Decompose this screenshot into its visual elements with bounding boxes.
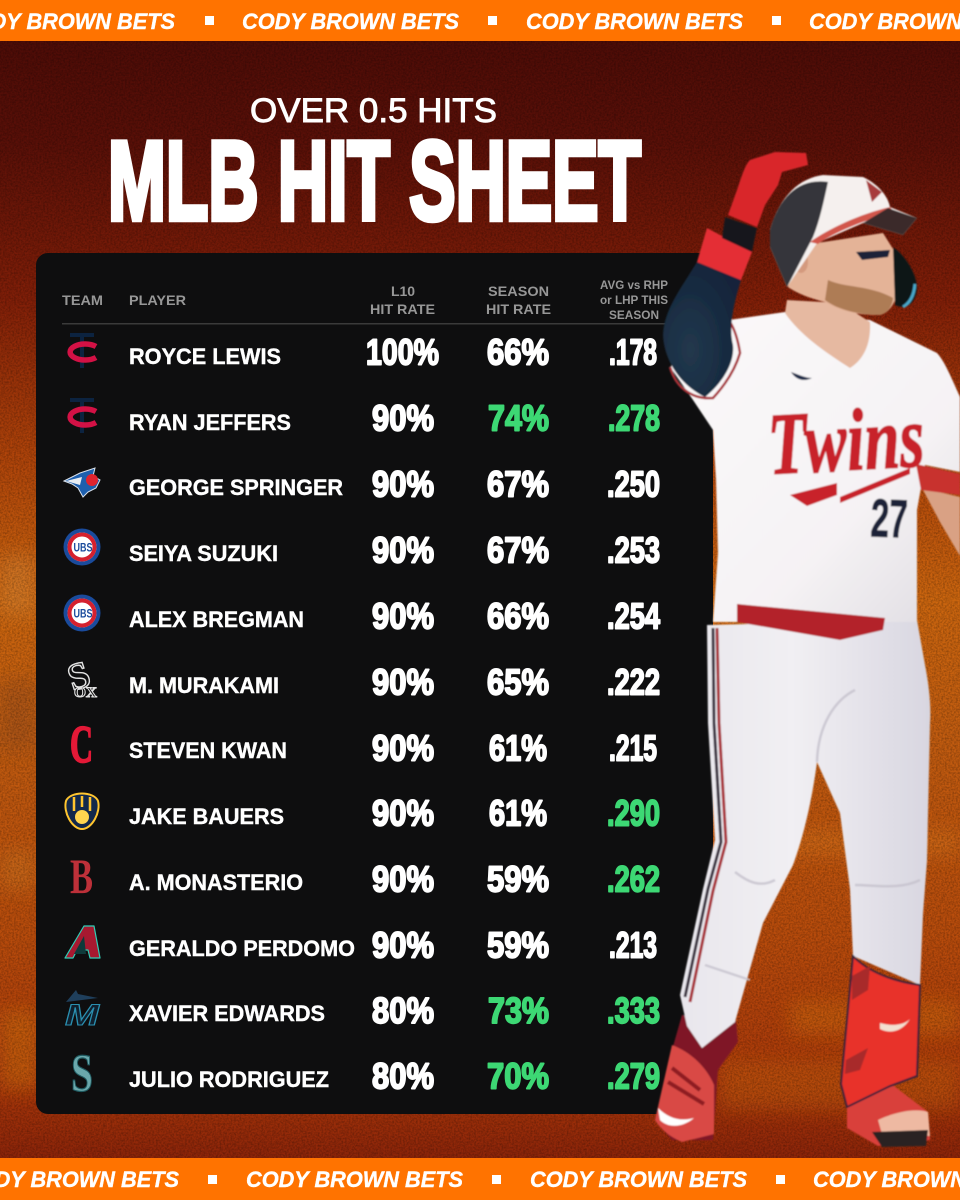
row: Julio Rodriguez: 80% bbox=[372, 1056, 434, 1096]
icon: Cubs logo: UBS bbox=[74, 540, 92, 554]
row: Alex Bregman: 90% bbox=[372, 596, 434, 636]
row: Xavier Edwards bbox=[65, 990, 660, 1032]
red arm band bbox=[697, 228, 752, 280]
row: M. Murakami: 65% bbox=[487, 662, 549, 702]
row: Ryan Jeffers: .278 bbox=[608, 398, 660, 438]
wrist band bbox=[722, 217, 757, 252]
row: Jake Bauers: .290 bbox=[607, 792, 660, 834]
bottom banner bbox=[0, 1158, 960, 1200]
row: Geraldo Perdomo: GERALDO PERDOMO bbox=[129, 936, 355, 961]
row: George Springer: 67% bbox=[487, 464, 549, 504]
row: Alex Bregman: ALEX BREGMAN bbox=[129, 607, 304, 632]
row: M. Murakami: 90% bbox=[372, 662, 434, 702]
row: Royce Lewis: 100% bbox=[366, 332, 439, 372]
right sleeve band bbox=[916, 464, 960, 495]
row: Geraldo Perdomo bbox=[65, 924, 657, 966]
icon: Twins logo bbox=[70, 335, 96, 368]
bottom banner: CODY BROWN BETS bbox=[246, 1167, 463, 1192]
row: Royce Lewis: 66% bbox=[487, 332, 549, 372]
row: Julio Rodriguez bbox=[71, 1043, 660, 1103]
row: Steven Kwan: 90% bbox=[372, 728, 434, 768]
table header: AVG vs RHP bbox=[600, 280, 668, 292]
row: Royce Lewis: .178 bbox=[609, 332, 657, 372]
icon: Marlins logo bbox=[65, 990, 100, 1032]
row: Alex Bregman: 66% bbox=[487, 596, 549, 636]
table header: TEAM bbox=[62, 292, 103, 308]
panel: hit table bbox=[36, 253, 713, 1114]
row: Seiya Suzuki bbox=[64, 528, 660, 570]
raised arm sleeve bbox=[663, 262, 741, 397]
table header bbox=[62, 280, 672, 324]
pants bbox=[680, 620, 930, 1048]
row: Ryan Jeffers bbox=[70, 398, 660, 438]
row: Steven Kwan: .215 bbox=[609, 728, 657, 768]
left cleat and sock bbox=[655, 1015, 738, 1142]
jersey swoosh bbox=[790, 468, 910, 506]
row: Seiya Suzuki: .253 bbox=[607, 530, 660, 570]
row: Alex Bregman bbox=[64, 594, 661, 636]
right shin guard bbox=[841, 956, 920, 1107]
icon: Cubs logo bbox=[64, 528, 100, 566]
row: George Springer bbox=[64, 464, 660, 504]
row: M. Murakami: .222 bbox=[607, 662, 660, 702]
table header: PLAYER bbox=[129, 292, 186, 308]
row: Julio Rodriguez: JULIO RODRIGUEZ bbox=[129, 1067, 329, 1092]
helmet bbox=[770, 175, 917, 307]
row: Julio Rodriguez: .279 bbox=[607, 1056, 660, 1096]
jersey number: 27 bbox=[870, 488, 909, 550]
icon: Diamondbacks logo bbox=[65, 926, 100, 958]
row: Geraldo Perdomo: .213 bbox=[609, 924, 657, 966]
row: Royce Lewis bbox=[70, 332, 657, 372]
icon: Red Sox logo: B bbox=[70, 848, 93, 904]
row: M. Murakami: M. MURAKAMI bbox=[129, 673, 279, 698]
chest logo bbox=[791, 372, 812, 380]
table header: HIT RATE bbox=[370, 301, 435, 317]
row: Ryan Jeffers: RYAN JEFFERS bbox=[129, 410, 291, 435]
row: George Springer: .250 bbox=[607, 464, 660, 504]
row: Jake Bauers: 90% bbox=[372, 792, 434, 834]
right forearm bbox=[922, 488, 960, 556]
row: Steven Kwan bbox=[70, 716, 657, 774]
row: A. Monasterio bbox=[70, 848, 660, 904]
row: George Springer: GEORGE SPRINGER bbox=[129, 475, 343, 500]
table header: HIT RATE bbox=[486, 301, 551, 317]
row: Xavier Edwards: XAVIER EDWARDS bbox=[129, 1001, 325, 1026]
top banner: CODY BROWN BETS bbox=[526, 9, 743, 34]
row: A. Monasterio: A. MONASTERIO bbox=[129, 870, 303, 895]
row: Steven Kwan: STEVEN KWAN bbox=[129, 738, 287, 763]
row: Geraldo Perdomo: 90% bbox=[372, 924, 434, 966]
bottom banner: CODY BROWN BETS bbox=[530, 1167, 747, 1192]
row: M. Murakami bbox=[62, 653, 660, 702]
right cleat bbox=[847, 1083, 930, 1147]
table header: L10 bbox=[391, 283, 415, 299]
row: Seiya Suzuki: SEIYA SUZUKI bbox=[129, 541, 278, 566]
icon: Cubs logo bbox=[64, 594, 100, 632]
batting glove bbox=[728, 152, 808, 227]
belt bbox=[737, 604, 885, 640]
row: A. Monasterio: 59% bbox=[487, 858, 549, 900]
icon: Mariners logo: S bbox=[71, 1043, 93, 1103]
row: Jake Bauers bbox=[65, 792, 660, 834]
row: Jake Bauers: JAKE BAUERS bbox=[129, 804, 284, 829]
top banner: CODY BROWN BETS bbox=[242, 9, 459, 34]
table header: SEASON bbox=[609, 310, 659, 322]
row: George Springer: 90% bbox=[372, 464, 434, 504]
row: Xavier Edwards: .333 bbox=[607, 990, 660, 1031]
row: Steven Kwan: 61% bbox=[489, 728, 547, 768]
row: Julio Rodriguez: 70% bbox=[487, 1056, 549, 1096]
icon: Marlins logo: M bbox=[65, 999, 100, 1032]
icon: Cubs logo: UBS bbox=[74, 606, 92, 620]
table header: SEASON bbox=[488, 283, 549, 299]
icon: Twins logo bbox=[70, 400, 96, 433]
row: Ryan Jeffers: 74% bbox=[488, 398, 549, 438]
icon: Brewers logo bbox=[65, 794, 99, 829]
icon: Blue Jays logo bbox=[64, 468, 100, 497]
icon: Guardians logo: C bbox=[70, 716, 93, 774]
row: Seiya Suzuki: 67% bbox=[487, 530, 549, 570]
icon: White Sox logo: OX bbox=[74, 685, 97, 701]
top banner bbox=[0, 0, 960, 41]
subtitle: OVER 0.5 HITS bbox=[250, 92, 497, 130]
jersey bbox=[670, 312, 960, 622]
neck bbox=[785, 300, 870, 368]
row: Jake Bauers: 61% bbox=[489, 792, 547, 834]
row: A. Monasterio: .262 bbox=[607, 858, 660, 900]
player: baseball batter bbox=[655, 152, 960, 1147]
icon: White Sox logo: S bbox=[62, 653, 95, 700]
row: Alex Bregman: .254 bbox=[607, 596, 661, 636]
row: Xavier Edwards: 73% bbox=[488, 990, 549, 1031]
row: Xavier Edwards: 80% bbox=[372, 990, 434, 1031]
face bbox=[788, 233, 898, 315]
row: Geraldo Perdomo: 59% bbox=[487, 924, 549, 966]
row: Seiya Suzuki: 90% bbox=[372, 530, 434, 570]
row: Ryan Jeffers: 90% bbox=[372, 398, 434, 438]
title: MLB HIT SHEET bbox=[108, 118, 641, 244]
table header: or LHP THIS bbox=[600, 295, 668, 307]
row: A. Monasterio: 90% bbox=[372, 858, 434, 900]
row: Royce Lewis: ROYCE LEWIS bbox=[129, 344, 281, 369]
